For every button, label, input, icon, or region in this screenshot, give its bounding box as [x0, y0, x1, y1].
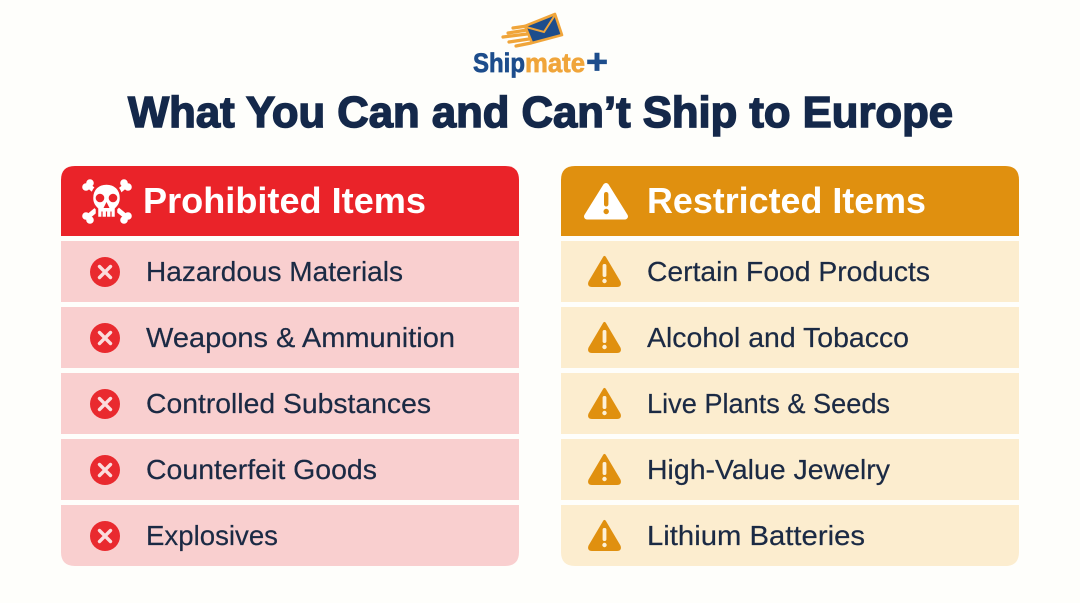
- row: Weapons & Ammunition: [61, 307, 519, 368]
- row: Alcohol and Tobacco: Alcohol and Tobacco: [647, 322, 909, 353]
- logo wordmark: mate: [525, 48, 585, 78]
- row: Counterfeit Goods: Counterfeit Goods: [146, 454, 377, 485]
- row: Lithium Batteries: Lithium Batteries: [647, 520, 865, 551]
- row: Counterfeit Goods: [61, 439, 519, 500]
- prohibited heading: Prohibited Items: [143, 180, 426, 221]
- row: Certain Food Products: Certain Food Products: [647, 256, 930, 287]
- row: Hazardous Materials: Hazardous Materials: [146, 256, 403, 287]
- row: Explosives: [61, 505, 519, 566]
- restricted heading: Restricted Items: [647, 180, 926, 221]
- title: What You Can and Can’t Ship to Europe: [128, 88, 953, 137]
- row: Alcohol and Tobacco: [561, 307, 1019, 368]
- icon: flying envelope: [503, 14, 562, 46]
- restricted header bar: [561, 166, 1019, 236]
- icon: warning triangle: [587, 186, 625, 216]
- logo wordmark: +: [586, 43, 608, 81]
- row: Live Plants & Seeds: Live Plants & Seeds: [647, 388, 890, 419]
- row: Certain Food Products: [561, 241, 1019, 302]
- row: Hazardous Materials: [61, 241, 519, 302]
- icon: skull and crossbones: [82, 179, 132, 224]
- row: Live Plants & Seeds: [561, 373, 1019, 434]
- panel: restricted items: [561, 166, 1019, 566]
- row: Weapons & Ammunition: Weapons & Ammunition: [146, 322, 455, 353]
- row: Lithium Batteries: [561, 505, 1019, 566]
- row: Controlled Substances: Controlled Substances: [146, 388, 431, 419]
- prohibited header bar: [61, 166, 519, 236]
- panel: prohibited items: [61, 166, 519, 566]
- row: High-Value Jewelry: High-Value Jewelry: [647, 454, 890, 485]
- row: Explosives: Explosives: [146, 520, 278, 551]
- logo wordmark: [473, 43, 608, 81]
- row: Controlled Substances: [61, 373, 519, 434]
- row: High-Value Jewelry: [561, 439, 1019, 500]
- logo: Shipmate+: [473, 14, 608, 81]
- logo wordmark: Ship: [473, 48, 525, 78]
